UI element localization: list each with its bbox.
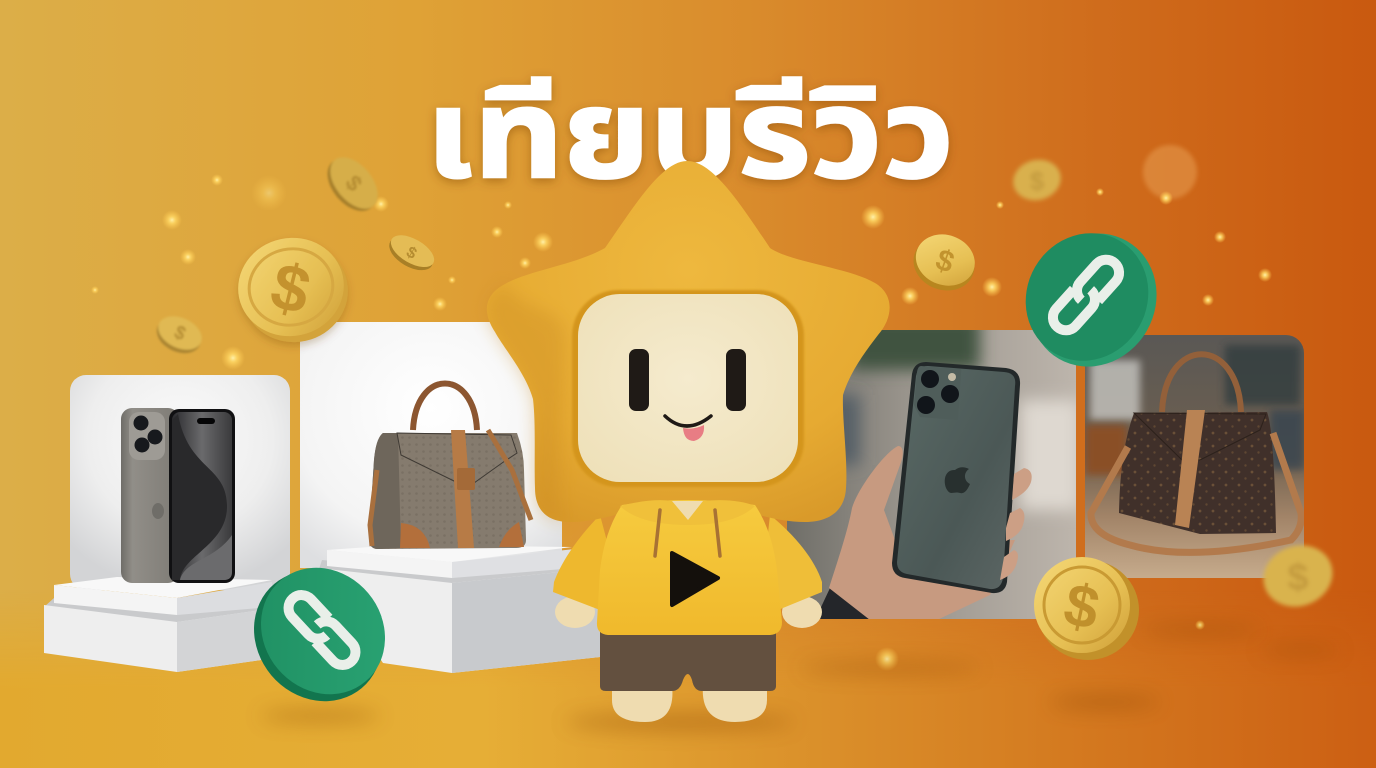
link badge left <box>228 543 411 727</box>
coin: $ <box>1058 570 1105 643</box>
hoodie <box>597 500 782 635</box>
white panel <box>300 322 562 568</box>
hood opening rim <box>572 290 804 487</box>
legs and feet <box>612 685 767 722</box>
arms and hands <box>553 515 822 628</box>
coin <box>384 229 439 277</box>
title: เทียบรีวิว <box>426 66 954 204</box>
left product display: iPhone <box>44 375 290 672</box>
pedestal <box>318 545 600 673</box>
coin top left large <box>229 228 357 352</box>
chain icon <box>1048 254 1124 336</box>
pedestal <box>44 577 272 672</box>
right photo: monogram bag <box>1085 335 1304 578</box>
play icon <box>672 553 718 605</box>
coin top left large: $ <box>264 248 318 328</box>
hood collar and strings <box>620 500 755 556</box>
coin <box>1255 536 1341 616</box>
small coins <box>151 148 1341 660</box>
link badge right <box>1003 210 1181 390</box>
shorts <box>600 630 776 691</box>
coin: $ <box>1030 166 1045 196</box>
eyes <box>629 349 746 411</box>
mascot: star character <box>487 161 890 722</box>
right photo: hand holding phone <box>787 315 1080 620</box>
handbag <box>369 384 531 549</box>
fingers <box>1000 468 1032 580</box>
coin <box>1034 557 1139 660</box>
coin <box>151 310 207 360</box>
chain icon <box>283 590 361 670</box>
handbag <box>1091 354 1301 552</box>
hand <box>829 446 1015 620</box>
coin: $ <box>1287 557 1309 599</box>
coin: $ <box>931 243 959 280</box>
sleeve <box>820 588 868 619</box>
coin: $ <box>171 322 189 344</box>
star hood <box>487 161 890 522</box>
face <box>578 294 798 482</box>
center product display: bag <box>300 322 600 673</box>
ground shadows <box>260 625 1340 730</box>
mouth and tongue <box>665 416 711 441</box>
coin <box>318 148 387 220</box>
white panel <box>70 375 290 590</box>
sparkles <box>91 174 1272 671</box>
iPhone back and front <box>121 408 235 583</box>
hood shading <box>487 284 570 522</box>
smartphone <box>892 362 1020 593</box>
coin <box>906 226 983 299</box>
coin: $ <box>403 244 419 263</box>
coin: $ <box>340 171 367 196</box>
coin <box>1009 154 1065 206</box>
